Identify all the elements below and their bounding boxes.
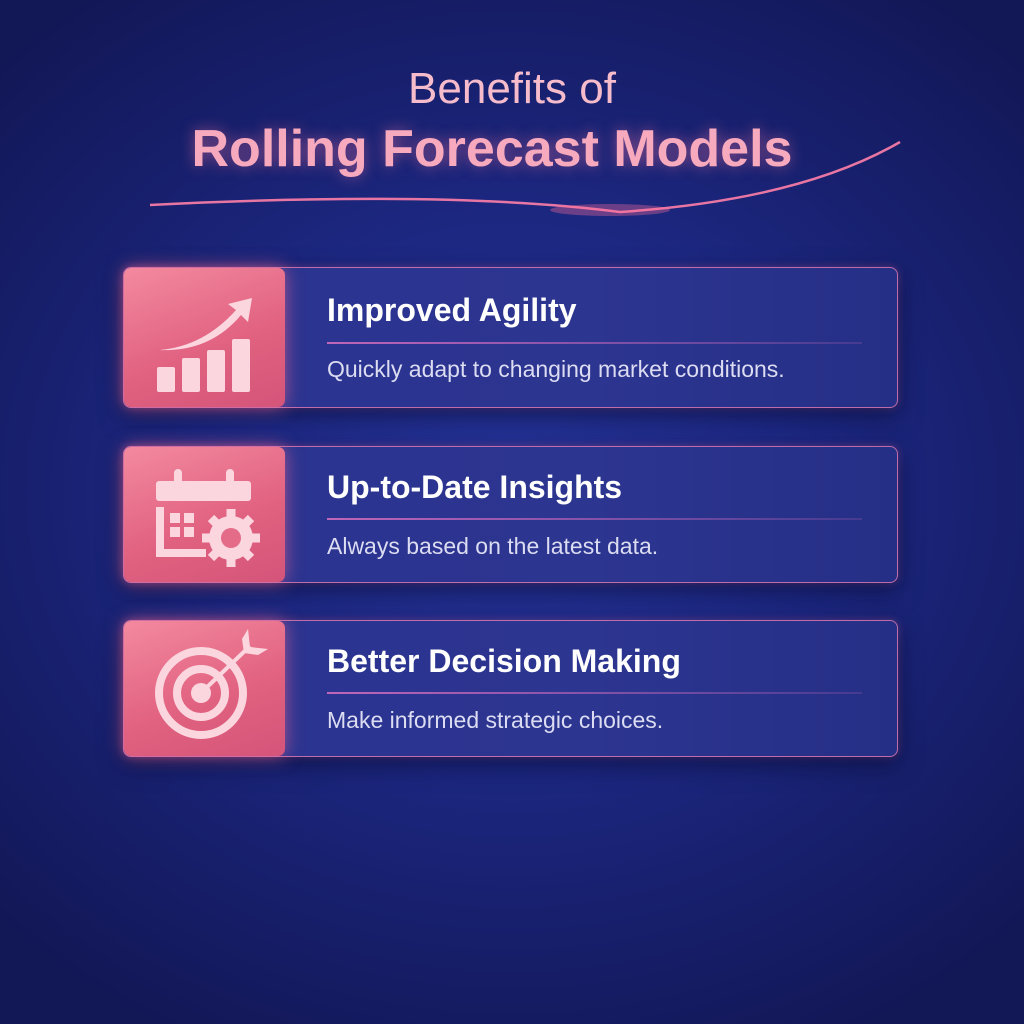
title: Rolling Forecast Models: Rolling Forecast Models xyxy=(192,120,792,178)
panel: Improved Agility xyxy=(123,267,898,408)
title: Benefits of: Benefits of xyxy=(408,64,616,113)
icon: target arrow xyxy=(124,621,285,756)
heading: Improved Agility xyxy=(327,292,577,328)
panel: Up-to-Date Insights xyxy=(123,446,898,583)
swoosh underline xyxy=(150,140,901,216)
description: Always based on the latest data. xyxy=(327,533,658,559)
heading: Up-to-Date Insights xyxy=(327,469,622,505)
heading: Better Decision Making xyxy=(327,643,681,679)
description: Make informed strategic choices. xyxy=(327,707,663,733)
panel: Better Decision Making xyxy=(123,620,898,757)
icon: calendar gear xyxy=(124,447,285,582)
icon: bar chart arrow xyxy=(124,268,285,407)
description: Quickly adapt to changing market conditions. xyxy=(327,356,785,382)
